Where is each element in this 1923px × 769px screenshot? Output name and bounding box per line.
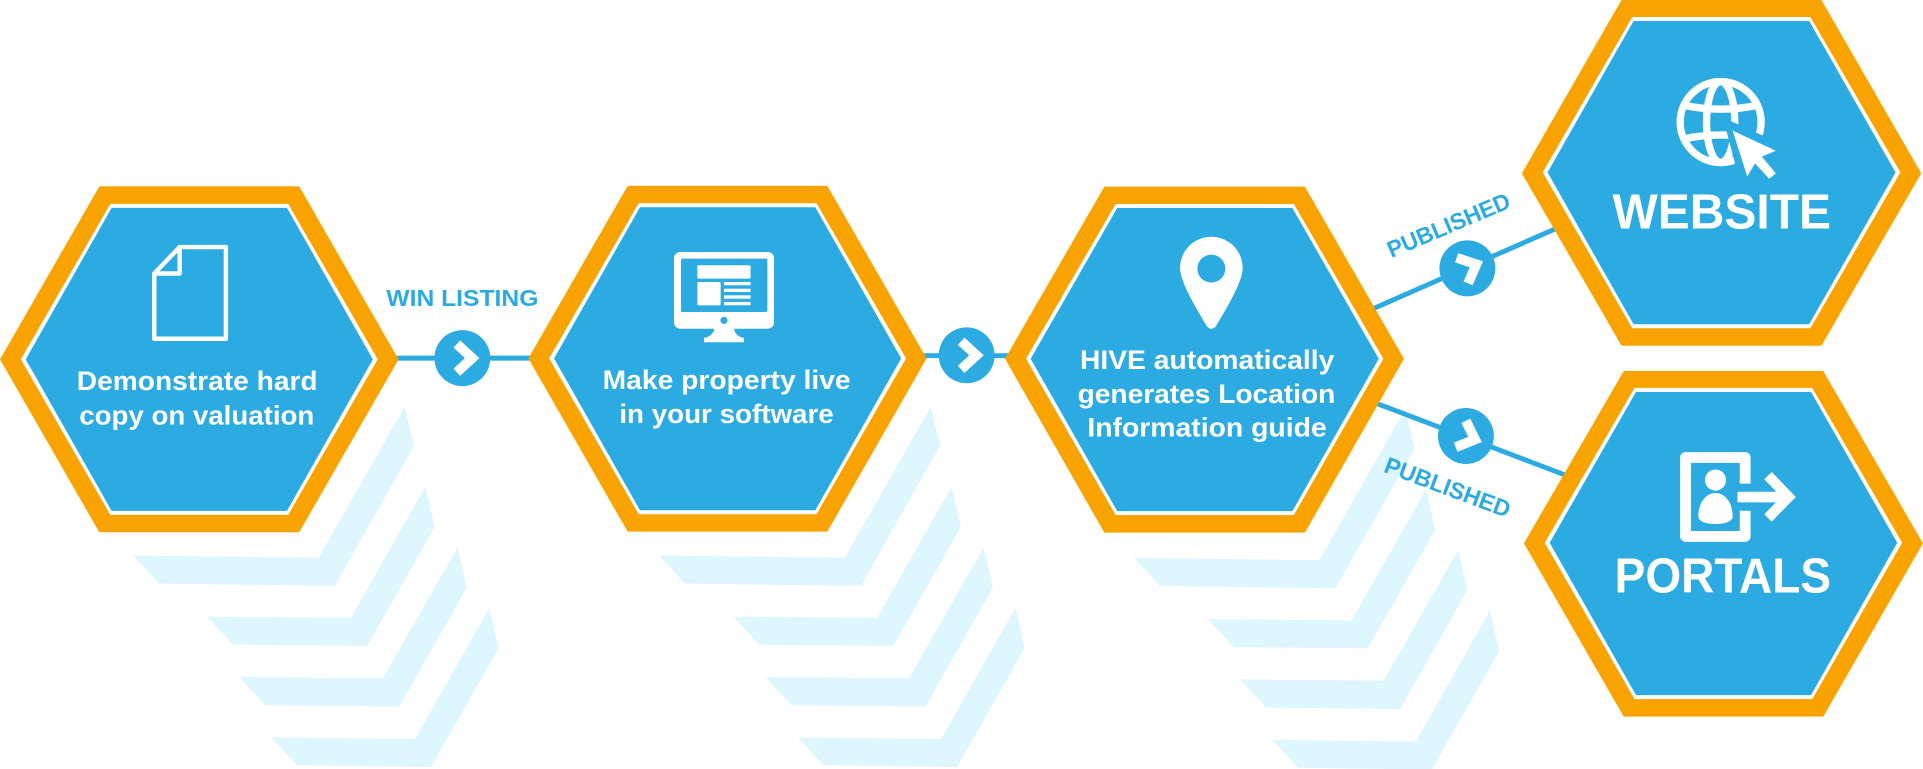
panel: portals [1524,371,1923,717]
icon: location pin [1180,237,1243,329]
panel: demonstrate hard copy [0,186,399,532]
step text: in your software [619,399,834,429]
panel: make property live [528,186,927,532]
hexagon frame [528,186,927,532]
hexagon frame [1522,0,1921,346]
label: portals: PORTALS [1615,549,1831,603]
connector line: to website [1371,228,1558,310]
icon: person leaving frame [1686,457,1789,536]
connector line: to portals [1374,402,1567,476]
background chevrons: step 3 [1134,417,1499,769]
step text [1078,345,1335,443]
step text: HIVE automatically [1080,345,1334,375]
hexagon frame [1005,187,1404,533]
step text [77,366,318,430]
label: published, website: PUBLISHED [1383,188,1514,263]
arrow node: to website [1430,231,1504,305]
icon: globe with cursor [1680,82,1781,186]
connector line: win listing [395,356,532,360]
step text: Make property live [603,365,851,395]
background chevrons: step 2 [659,407,1025,767]
panel: website [1522,0,1921,346]
background chevrons: step 1 [133,407,499,767]
label: website: WEBSITE [1612,186,1831,240]
label: win listing: WIN LISTING [386,285,538,311]
arrow node: to portals [1430,400,1502,472]
step text: copy on valuation [79,400,314,430]
icon: monitor [674,252,774,342]
step text [603,365,851,429]
step text: Demonstrate hard [77,366,318,396]
arrow node: win listing [434,330,490,386]
panel: HIVE location guide [1005,187,1404,533]
label: published, portals: PUBLISHED [1381,452,1514,523]
step text: generates Location [1078,379,1335,409]
hexagon frame [0,186,399,532]
hexagon frame [1524,371,1923,717]
connector line: step 2 to step 3 [923,354,1009,358]
icon: document [154,247,226,339]
arrow node: step 2 to step 3 [939,327,995,383]
step text: Information guide [1087,413,1327,443]
